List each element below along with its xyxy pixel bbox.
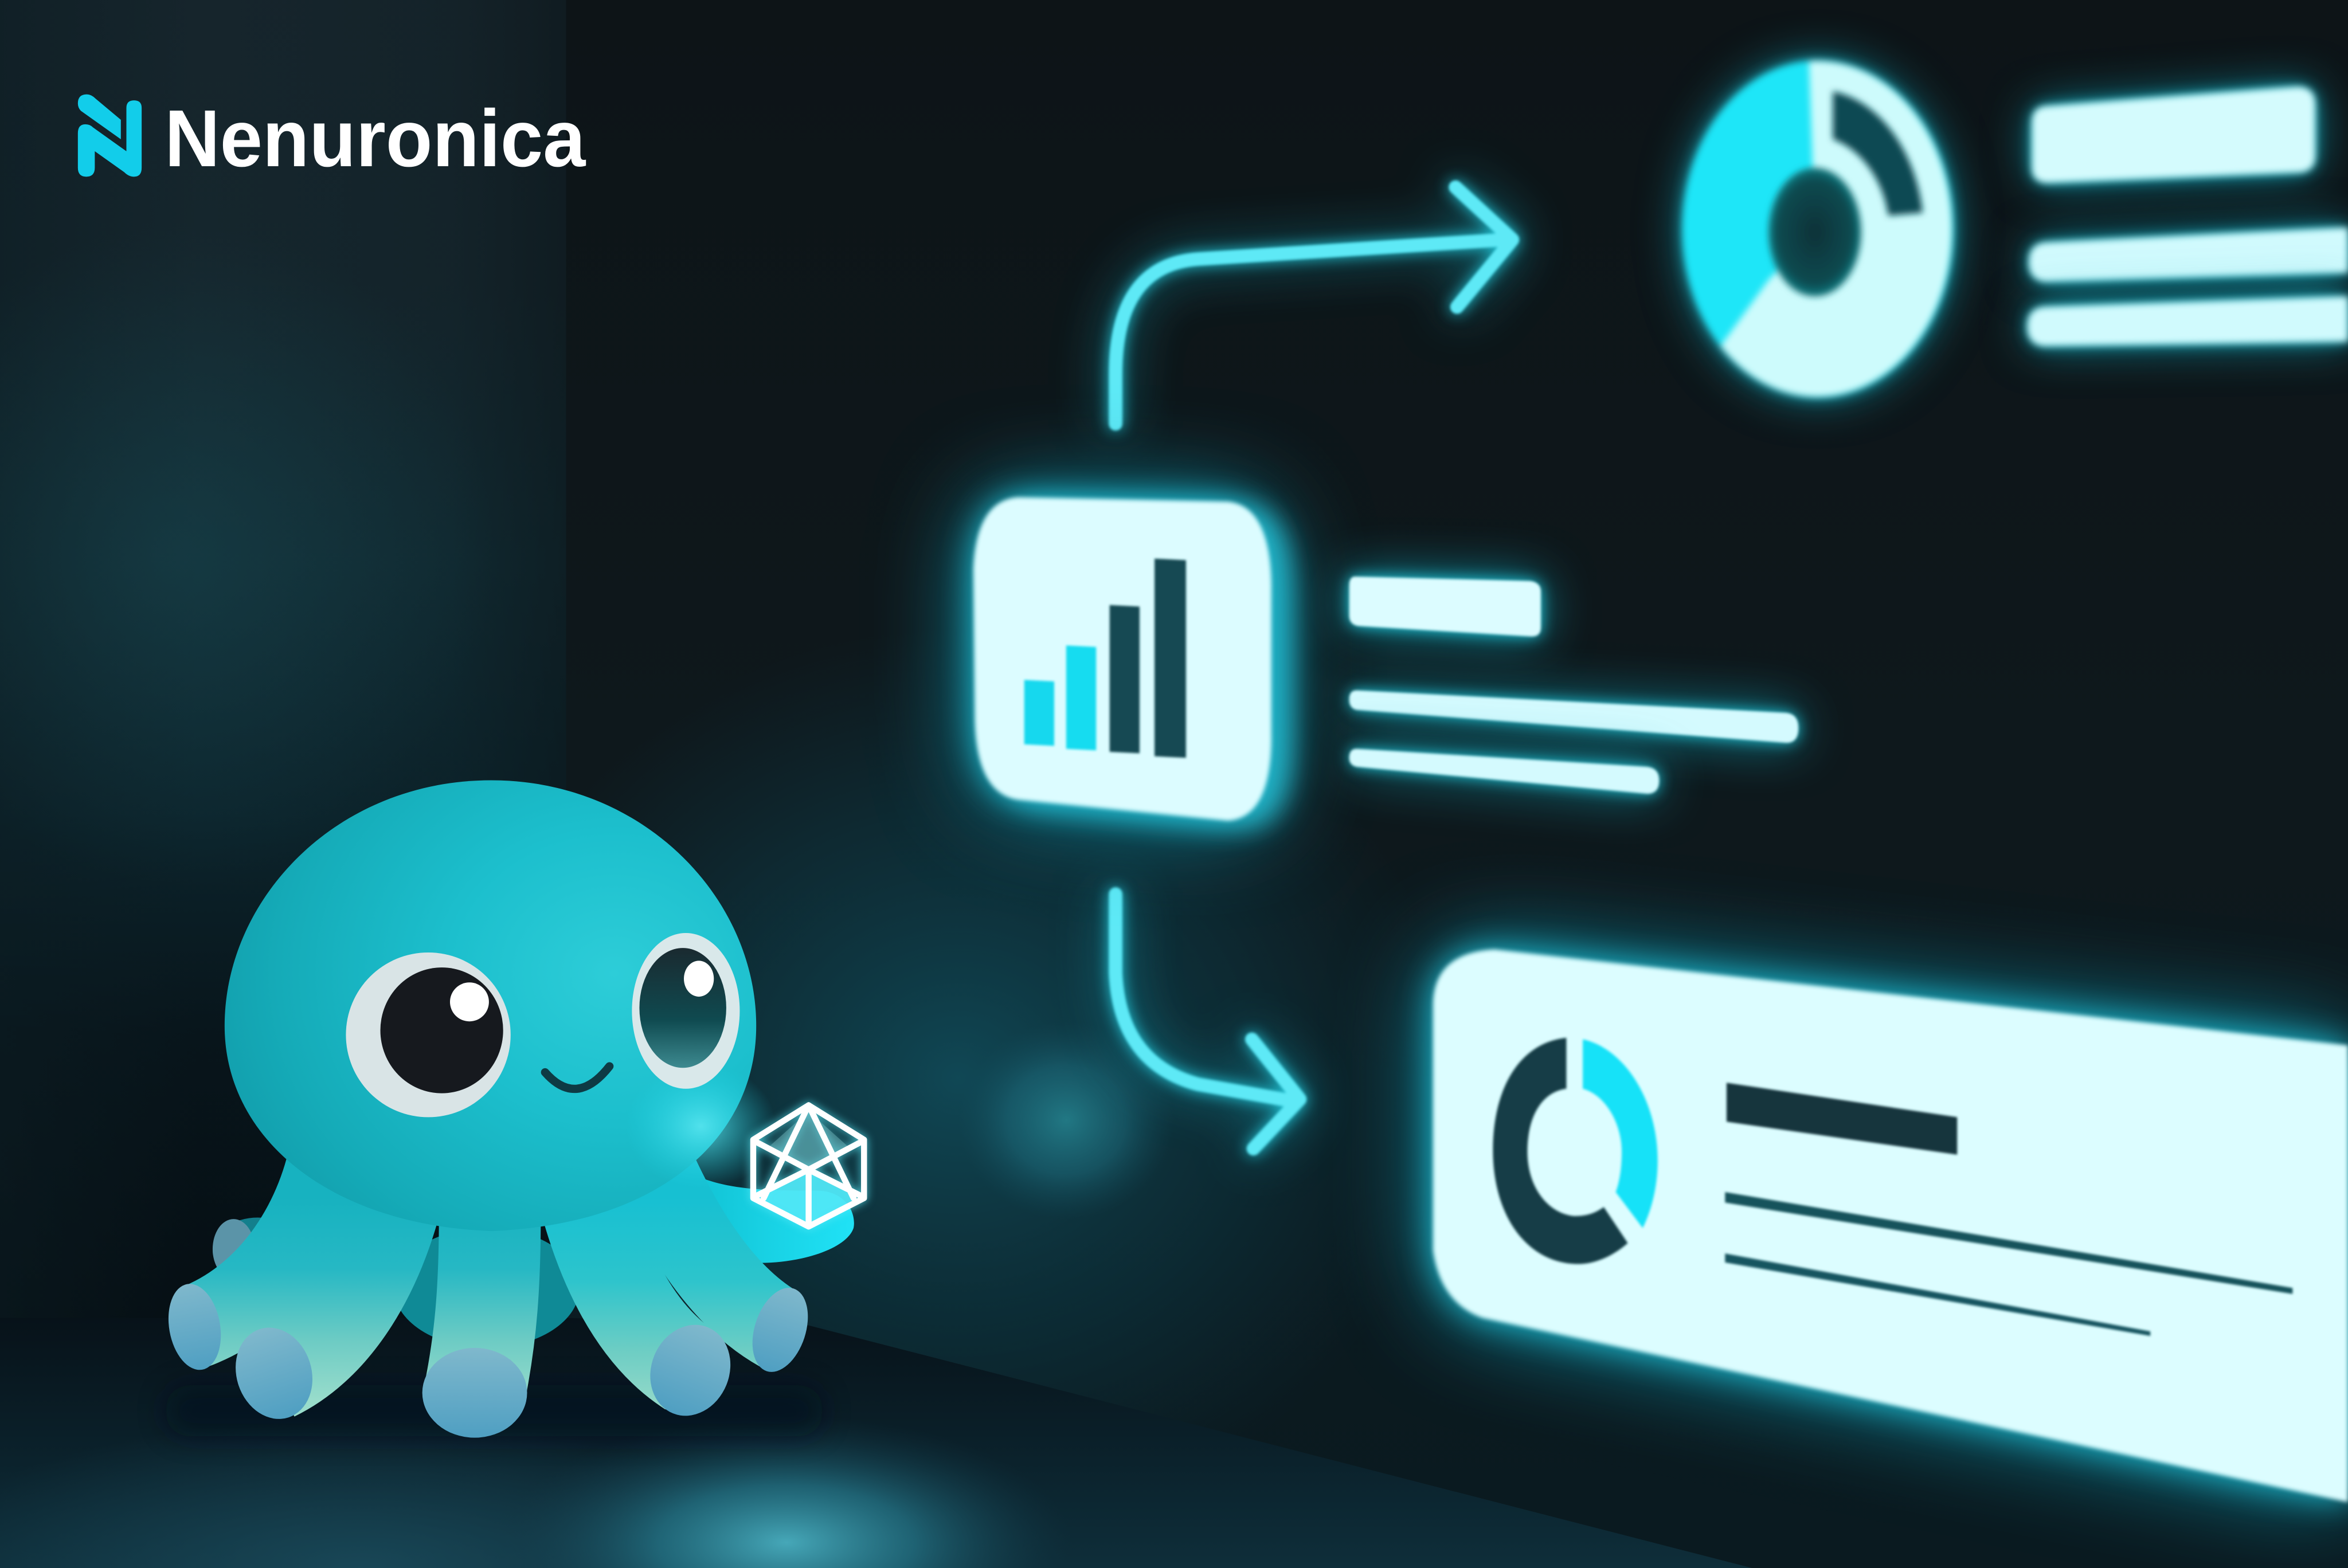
far back tentacle	[213, 1218, 303, 1283]
tentacle left	[162, 1146, 332, 1374]
tentacle front left	[224, 1175, 401, 1429]
text placeholder: center card heading	[1349, 577, 1541, 637]
panel: center bar chart card	[973, 497, 1292, 826]
icon: glowing crystal cube	[753, 1106, 864, 1226]
wordmark: Nenuronica	[165, 93, 586, 183]
tentacle right	[644, 1146, 818, 1379]
head	[225, 780, 776, 1231]
donut wedge and hole	[1768, 91, 1923, 296]
text placeholder: top line 2	[2028, 296, 2348, 346]
bar chart icon	[1024, 559, 1186, 758]
arrow: down to bottom card	[1116, 894, 1300, 1148]
card line 2	[1725, 1253, 2150, 1336]
card donut chart	[1493, 1038, 1658, 1264]
text placeholder: top heading	[2032, 87, 2315, 183]
donut cyan segment	[1683, 61, 1952, 397]
text placeholder: top line 1	[2029, 228, 2348, 281]
logo icon: N mark	[78, 95, 142, 177]
tentacle front right	[578, 1168, 744, 1428]
logo: Nenuronica	[78, 93, 586, 183]
text placeholder: center card line 1	[1349, 691, 1798, 743]
right eye	[632, 933, 739, 1089]
glow spot on wall	[958, 1021, 1174, 1219]
body under head	[394, 1228, 580, 1348]
card line 1	[1725, 1192, 2292, 1294]
tentacle center	[422, 1183, 527, 1438]
left eye	[346, 952, 511, 1117]
octopus mascot	[162, 780, 854, 1438]
donut light segment	[1720, 61, 1952, 397]
panel: bottom glowing card	[1433, 950, 2348, 1502]
smile	[545, 1067, 609, 1089]
octopus shadow	[165, 1385, 824, 1436]
arrow: up to pie chart	[1116, 187, 1512, 424]
panel: top donut chart	[1683, 61, 1952, 397]
card tile	[973, 497, 1292, 826]
text placeholder: center card line 2	[1349, 749, 1659, 794]
card body	[1433, 950, 2348, 1502]
card heading bar	[1727, 1083, 1957, 1155]
holding arm	[674, 1168, 854, 1263]
